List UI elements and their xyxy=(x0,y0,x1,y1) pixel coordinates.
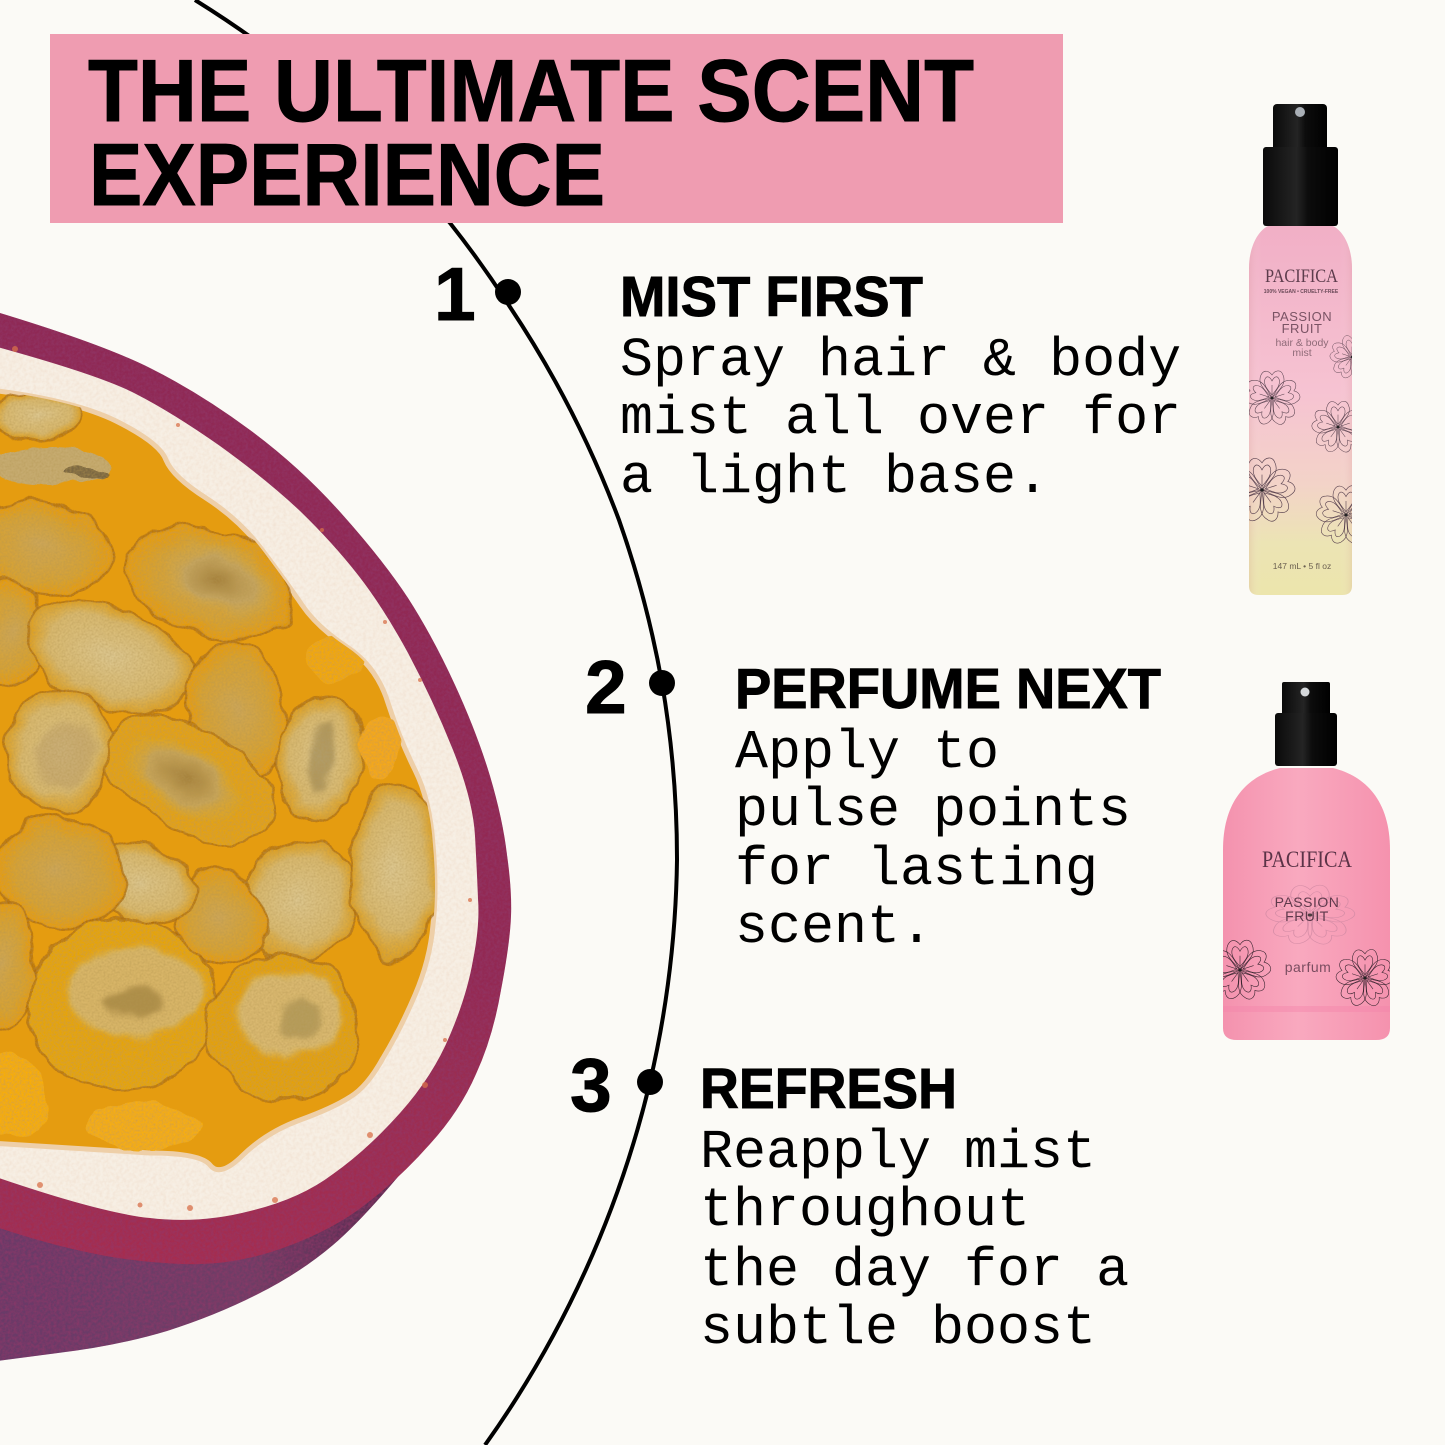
parfum label: PASSION xyxy=(1275,894,1339,910)
step 3 body: subtle boost xyxy=(700,1297,1096,1360)
mist label: mist xyxy=(1292,347,1312,359)
mist cap xyxy=(1263,104,1338,226)
step 3 heading: REFRESH xyxy=(700,1057,957,1121)
step 2 body: scent. xyxy=(735,896,933,959)
mist flowers xyxy=(1249,335,1352,544)
step 1 xyxy=(434,252,1181,509)
step 3 xyxy=(570,1043,1129,1360)
step 1 heading: MIST FIRST xyxy=(620,265,923,329)
step 1 dot xyxy=(495,279,521,305)
fruit pith xyxy=(0,345,478,1220)
step 1 number: 1 xyxy=(434,252,476,336)
step 3 dot xyxy=(637,1069,663,1095)
parfum cap xyxy=(1275,682,1337,766)
passion fruit half xyxy=(0,310,511,1362)
step 2 body: Apply to xyxy=(735,721,999,784)
product: parfum bottle xyxy=(1223,682,1390,1040)
mist body xyxy=(1249,226,1352,595)
fruit pulp xyxy=(0,390,435,1170)
step 2 body: pulse points xyxy=(735,779,1131,842)
step 2 dot xyxy=(649,670,675,696)
step 3 number: 3 xyxy=(570,1043,612,1127)
parfum label: PACIFICA xyxy=(1262,847,1352,872)
title banner xyxy=(50,34,1063,224)
step 3 body: the day for a xyxy=(700,1239,1129,1302)
parfum body xyxy=(1223,768,1390,1040)
title banner: EXPERIENCE xyxy=(89,125,605,224)
seeds xyxy=(0,393,439,1147)
parfum label: parfum xyxy=(1285,959,1331,975)
step 2 body: for lasting xyxy=(735,838,1098,901)
fruit outer skin xyxy=(0,1150,420,1362)
product: hair and body mist bottle xyxy=(1249,104,1352,595)
mist label: hair & body xyxy=(1275,337,1329,349)
mist label xyxy=(1264,266,1339,571)
mist label: FRUIT xyxy=(1282,321,1322,336)
step 3 body: throughout xyxy=(700,1179,1030,1242)
step 2 heading: PERFUME NEXT xyxy=(735,657,1161,721)
mist label: PACIFICA xyxy=(1265,266,1338,287)
step 1 body: a light base. xyxy=(620,446,1049,509)
curved timeline line xyxy=(195,0,677,1445)
step 1 body: Spray hair & body xyxy=(620,329,1181,392)
step 2 xyxy=(585,645,1161,959)
mist label: PASSION xyxy=(1272,309,1332,324)
parfum label xyxy=(1262,847,1352,975)
fruit rim xyxy=(0,310,511,1264)
mist label: 147 mL • 5 fl oz xyxy=(1273,561,1331,571)
title text: THE ULTIMATE SCENT xyxy=(88,41,974,140)
mist label: 100% VEGAN • CRUELTY-FREE xyxy=(1264,289,1339,295)
parfum flowers xyxy=(1223,885,1390,1006)
step 1 body: mist all over for xyxy=(620,387,1181,450)
step 2 number: 2 xyxy=(585,645,627,729)
parfum label: FRUIT xyxy=(1285,908,1329,924)
step 3 body: Reapply mist xyxy=(700,1121,1096,1184)
pith specks xyxy=(12,346,472,1211)
